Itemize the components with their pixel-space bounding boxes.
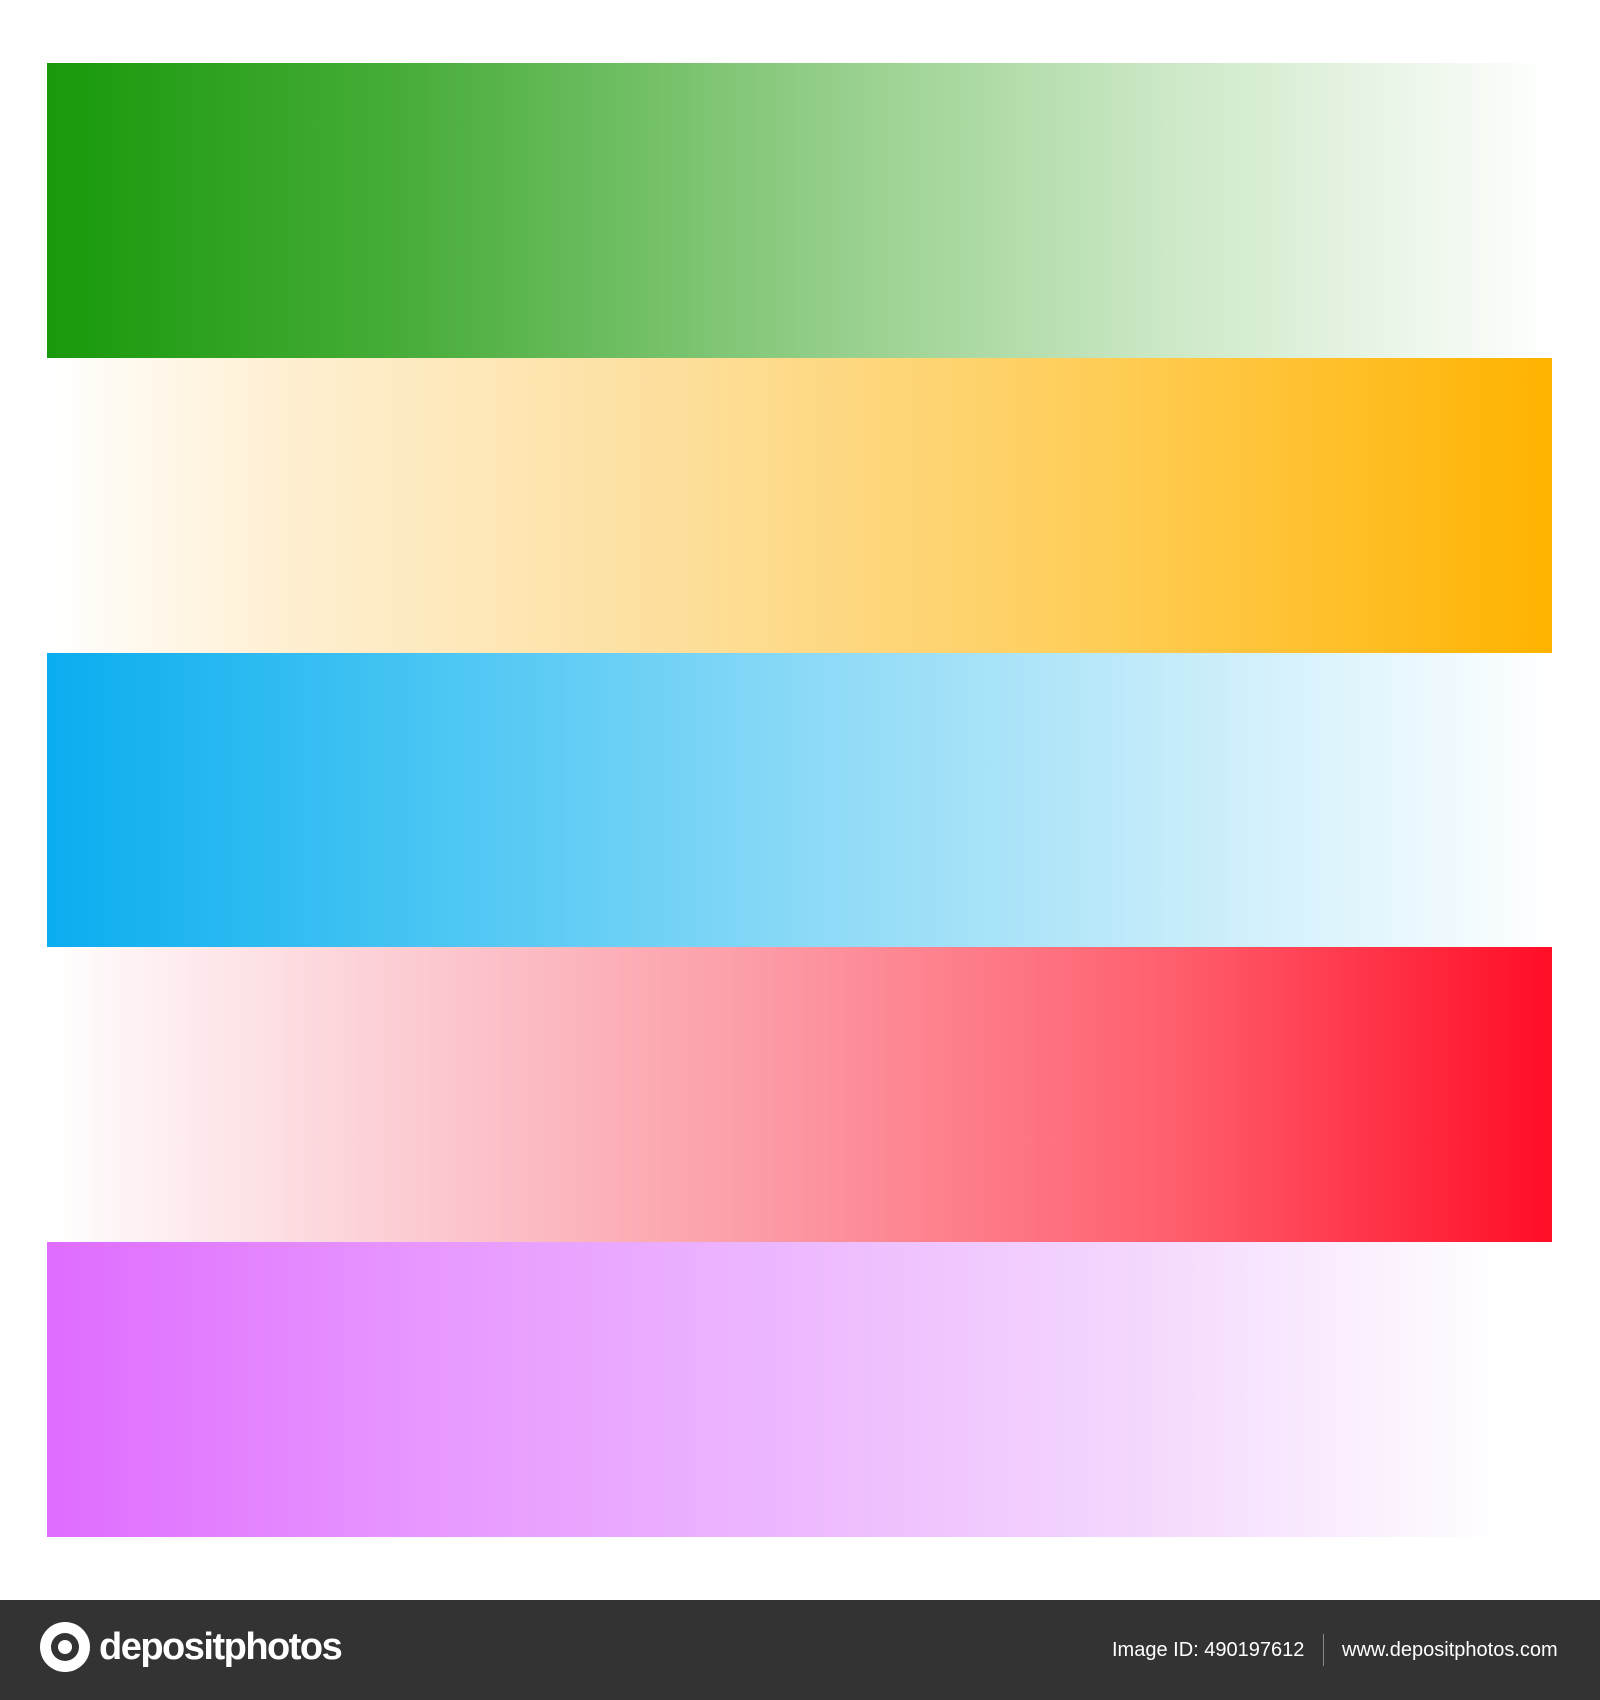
- footer: [0, 1600, 1600, 1700]
- bar: purple gradient: [47, 1242, 1552, 1537]
- icon: logo circle: [40, 1622, 90, 1672]
- bar: green gradient: [47, 63, 1552, 358]
- website: www.depositphotos.com: [1342, 1639, 1558, 1661]
- bar: orange gradient: [47, 358, 1552, 653]
- bar: red gradient: [47, 947, 1552, 1242]
- logo text: depositphotos: [99, 1626, 341, 1668]
- bar: blue gradient: [47, 653, 1552, 947]
- image id: Image ID: 490197612: [1112, 1639, 1304, 1661]
